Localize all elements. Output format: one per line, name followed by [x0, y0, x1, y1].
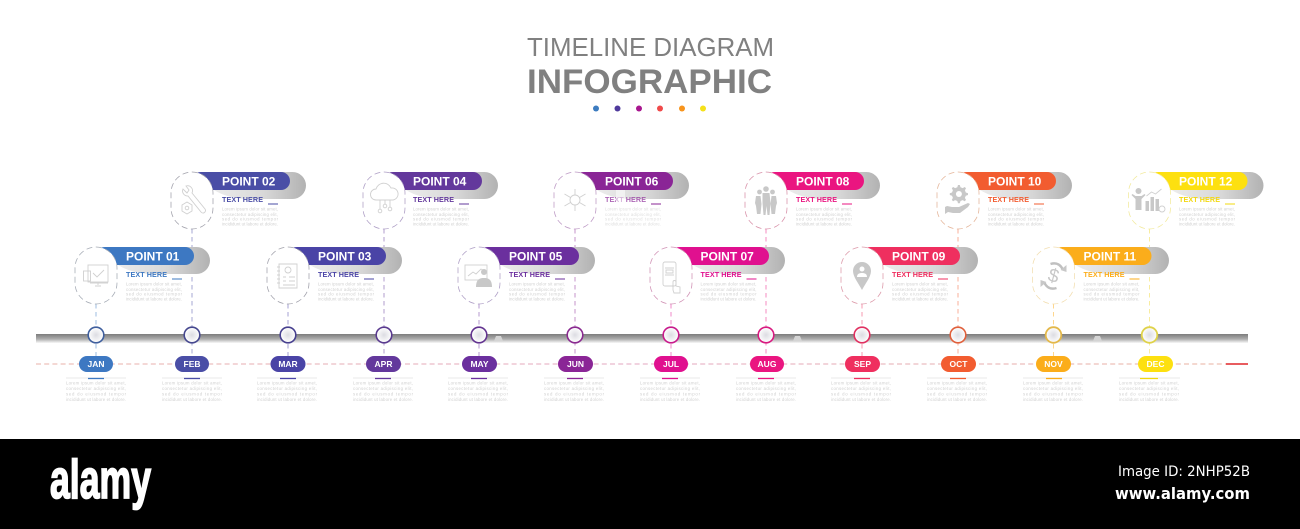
point 02: sed do eiusmod tempor: [222, 217, 279, 222]
icon: wrench and nut: [182, 186, 206, 214]
point 05: [458, 247, 595, 356]
point 07: TEXT HERE: [700, 270, 742, 279]
point 07: Lorem ipsum dolor sit amet,: [700, 282, 756, 286]
point 02: incididunt ut labore et dolore.: [222, 222, 278, 227]
month: SEP: incididunt ut labore et dolore.: [831, 397, 891, 402]
month: MAY: Lorem ipsum dolor sit amet,: [448, 380, 508, 386]
month: MAR: [257, 327, 318, 402]
month: FEB: incididunt ut labore et dolore.: [162, 397, 222, 402]
point 01: incididunt ut labore et dolore.: [126, 297, 182, 302]
point 01: sed do eiusmod tempor: [126, 292, 183, 297]
point 12: POINT 12: [1179, 174, 1233, 188]
point 07: consectetur adipiscing elit,: [700, 287, 756, 292]
month: MAY: incididunt ut labore et dolore.: [448, 397, 508, 402]
icon: dollar exchange: $: [1046, 265, 1062, 288]
point 05: Lorem ipsum dolor sit amet,: [509, 282, 565, 286]
month: DEC: Lorem ipsum dolor sit amet,: [1119, 380, 1179, 386]
point 09: sed do eiusmod tempor: [892, 292, 949, 297]
month: AUG: incididunt ut labore et dolore.: [736, 397, 796, 402]
point 09: TEXT HERE: [892, 270, 933, 279]
point 01: consectetur adipiscing elit,: [126, 287, 182, 292]
point 10: consectetur adipiscing elit,: [988, 212, 1044, 217]
point 11: consectetur adipiscing elit,: [1084, 287, 1140, 292]
point 08: Lorem ipsum dolor sit amet,: [796, 206, 852, 212]
month: MAY: MAY: [470, 359, 489, 369]
month: AUG: sed do eiusmod tempor: [736, 392, 797, 396]
point 04: incididunt ut labore et dolore.: [413, 222, 469, 227]
point 11: incididunt ut labore et dolore.: [1084, 297, 1140, 302]
point 06: incididunt ut labore et dolore.: [605, 222, 661, 227]
month: DEC: DEC: [1147, 359, 1164, 369]
icon: notebook: [277, 264, 297, 288]
month: JAN: Lorem ipsum dolor sit amet,: [66, 380, 126, 386]
point 10: POINT 10: [988, 174, 1042, 188]
month: NOV: [1023, 327, 1084, 402]
point 01: TEXT HERE: [126, 270, 167, 279]
point 10: Lorem ipsum dolor sit amet,: [988, 206, 1044, 212]
icon: monitor with check: [84, 265, 108, 286]
point 09: [841, 247, 978, 356]
point 11: TEXT HERE: [1084, 270, 1125, 279]
title: TIMELINE DIAGRAM: [527, 34, 774, 62]
point 05: consectetur adipiscing elit,: [509, 287, 565, 292]
point 03: [267, 247, 402, 356]
month: SEP: Lorem ipsum dolor sit amet,: [831, 380, 891, 386]
point 04: Lorem ipsum dolor sit amet,: [413, 206, 469, 212]
point 03: sed do eiusmod tempor: [318, 292, 375, 297]
point 06: sed do eiusmod tempor: [605, 217, 662, 222]
month: NOV: consectetur adipiscing elit,: [1023, 386, 1083, 391]
month: APR: Lorem ipsum dolor sit amet,: [353, 380, 413, 386]
point 08: POINT 08: [796, 174, 850, 188]
point 03: Lorem ipsum dolor sit amet,: [318, 282, 374, 286]
month: MAR: Lorem ipsum dolor sit amet,: [257, 380, 317, 386]
month: JUL: Lorem ipsum dolor sit amet,: [640, 380, 700, 386]
point 03: TEXT HERE: [318, 270, 359, 279]
point 09: Lorem ipsum dolor sit amet,: [892, 282, 948, 286]
point 02: [171, 172, 306, 356]
month: AUG: AUG: [758, 359, 777, 369]
month: APR: sed do eiusmod tempor: [353, 392, 414, 396]
month: JAN: JAN: [87, 359, 105, 369]
month: JUN: JUN: [567, 359, 584, 369]
point 02: POINT 02: [222, 174, 276, 188]
month: JUL: JUL: [663, 359, 679, 369]
month: NOV: incididunt ut labore et dolore.: [1023, 397, 1083, 402]
month: JUN: sed do eiusmod tempor: [544, 392, 605, 396]
point 09: POINT 09: [892, 250, 946, 264]
point 08: sed do eiusmod tempor: [796, 217, 853, 222]
point 11: [1032, 247, 1169, 356]
point 01: Lorem ipsum dolor sit amet,: [126, 282, 182, 286]
point 02: consectetur adipiscing elit,: [222, 212, 278, 217]
month: DEC: incididunt ut labore et dolore.: [1119, 397, 1179, 402]
point 08: consectetur adipiscing elit,: [796, 212, 852, 217]
point 07: POINT 07: [700, 250, 754, 264]
icon: people and bars: [1132, 188, 1159, 211]
point 10: sed do eiusmod tempor: [988, 217, 1045, 222]
point 07: [650, 247, 785, 356]
month: DEC: sed do eiusmod tempor: [1119, 392, 1180, 396]
point 06: [554, 172, 689, 356]
month: NOV: Lorem ipsum dolor sit amet,: [1023, 380, 1083, 386]
month: SEP: consectetur adipiscing elit,: [831, 386, 891, 391]
point 03: POINT 03: [318, 250, 372, 264]
point 08: TEXT HERE: [796, 195, 837, 204]
month: JAN: consectetur adipiscing elit,: [66, 386, 126, 391]
month: JUN: incididunt ut labore et dolore.: [544, 397, 604, 402]
month: MAR: sed do eiusmod tempor: [257, 392, 318, 396]
month: APR: incididunt ut labore et dolore.: [353, 397, 413, 402]
point 09: consectetur adipiscing elit,: [892, 287, 948, 292]
month: JUN: [544, 327, 605, 402]
month: OCT: [927, 327, 988, 402]
month: DEC: [1119, 327, 1180, 402]
point 01: POINT 01: [126, 250, 180, 264]
month: SEP: [831, 327, 892, 402]
month: AUG: Lorem ipsum dolor sit amet,: [736, 380, 796, 386]
icon: cloud network: [370, 183, 398, 213]
point 07: incididunt ut labore et dolore.: [700, 297, 756, 302]
point 03: consectetur adipiscing elit,: [318, 287, 374, 292]
point 01: [75, 247, 210, 356]
image id: Image ID: 2NHP52B: [1118, 464, 1250, 480]
month: MAY: [448, 327, 509, 402]
alamy logo: alamy: [50, 448, 151, 510]
month: SEP: SEP: [854, 359, 871, 369]
icon: gear on hand: [945, 185, 970, 214]
point 04: TEXT HERE: [413, 195, 454, 204]
month: JUN: consectetur adipiscing elit,: [544, 386, 604, 391]
point 10: TEXT HERE: [988, 195, 1029, 204]
point 05: incididunt ut labore et dolore.: [509, 297, 565, 302]
point 04: POINT 04: [413, 174, 467, 188]
month: JUL: [640, 327, 701, 402]
month: JAN: sed do eiusmod tempor: [66, 392, 127, 396]
month: NOV: NOV: [1044, 359, 1063, 369]
month: APR: consectetur adipiscing elit,: [353, 386, 413, 391]
title: [527, 34, 774, 101]
point 10: [937, 172, 1072, 356]
month: FEB: consectetur adipiscing elit,: [162, 386, 222, 391]
month: AUG: consectetur adipiscing elit,: [736, 386, 796, 391]
point 12: sed do eiusmod tempor: [1179, 217, 1236, 222]
point 06: Lorem ipsum dolor sit amet,: [605, 206, 661, 212]
point 02: Lorem ipsum dolor sit amet,: [222, 206, 278, 212]
month: FEB: [162, 327, 223, 402]
icon: chart and presenter: [465, 265, 487, 280]
point 11: POINT 11: [1084, 250, 1137, 264]
point 12: consectetur adipiscing elit,: [1179, 212, 1235, 217]
month: FEB: FEB: [184, 359, 200, 369]
point 12: Lorem ipsum dolor sit amet,: [1179, 206, 1235, 212]
title dots: [593, 106, 706, 112]
point 02: TEXT HERE: [222, 195, 263, 204]
month: JAN: incididunt ut labore et dolore.: [66, 397, 126, 402]
point 03: incididunt ut labore et dolore.: [318, 297, 374, 302]
month: OCT: sed do eiusmod tempor: [927, 392, 988, 396]
point 05: TEXT HERE: [509, 270, 550, 279]
month: FEB: Lorem ipsum dolor sit amet,: [162, 380, 222, 386]
website: www.alamy.com: [1115, 484, 1250, 503]
point 06: POINT 06: [605, 174, 659, 188]
month: OCT: consectetur adipiscing elit,: [927, 386, 987, 391]
month: NOV: sed do eiusmod tempor: [1023, 392, 1084, 396]
point 08: [745, 172, 880, 356]
point 05: sed do eiusmod tempor: [509, 292, 566, 297]
month: MAY: sed do eiusmod tempor: [448, 392, 509, 396]
point 11: sed do eiusmod tempor: [1084, 292, 1140, 297]
point 11: Lorem ipsum dolor sit amet,: [1084, 282, 1140, 286]
month: JUL: consectetur adipiscing elit,: [640, 386, 700, 391]
icon: hub network: [564, 189, 586, 211]
point 10: incididunt ut labore et dolore.: [988, 222, 1044, 227]
point 04: [363, 172, 498, 356]
month: MAR: incididunt ut labore et dolore.: [257, 397, 317, 402]
month: MAR: consectetur adipiscing elit,: [257, 386, 317, 391]
month: FEB: sed do eiusmod tempor: [162, 392, 223, 396]
point 08: incididunt ut labore et dolore.: [796, 222, 852, 227]
point 04: consectetur adipiscing elit,: [413, 212, 469, 217]
point 06: TEXT HERE: [605, 195, 646, 204]
month: SEP: sed do eiusmod tempor: [831, 392, 892, 396]
point 07: sed do eiusmod tempor: [700, 292, 757, 297]
month: DEC: consectetur adipiscing elit,: [1119, 386, 1179, 391]
month: OCT: Lorem ipsum dolor sit amet,: [927, 380, 987, 386]
month: JAN: [66, 327, 127, 402]
title: INFOGRAPHIC: [527, 63, 772, 101]
icon: location pin: [853, 262, 871, 290]
timeline bar: [36, 334, 1248, 343]
month: OCT: incididunt ut labore et dolore.: [927, 397, 987, 402]
point 05: POINT 05: [509, 250, 563, 264]
footer band: [0, 439, 1300, 529]
point 04: sed do eiusmod tempor: [413, 217, 470, 222]
month: APR: APR: [375, 359, 392, 369]
month: JUL: incididunt ut labore et dolore.: [640, 397, 700, 402]
icon: group of people: [755, 186, 777, 215]
month: AUG: [736, 327, 797, 402]
point 12: [1128, 172, 1264, 356]
point 12: TEXT HERE: [1179, 195, 1220, 204]
month: JUN: Lorem ipsum dolor sit amet,: [544, 380, 604, 386]
point 06: consectetur adipiscing elit,: [605, 212, 661, 217]
month: MAR: MAR: [278, 359, 298, 369]
month: JUL: sed do eiusmod tempor: [640, 392, 701, 396]
dashed month line: [36, 363, 1248, 365]
point 09: incididunt ut labore et dolore.: [892, 297, 948, 302]
month: MAY: consectetur adipiscing elit,: [448, 386, 508, 391]
month: OCT: OCT: [950, 359, 968, 369]
month: APR: [353, 327, 414, 402]
icon: phone and hand: [663, 262, 680, 293]
point 12: incididunt ut labore et dolore.: [1179, 222, 1235, 227]
